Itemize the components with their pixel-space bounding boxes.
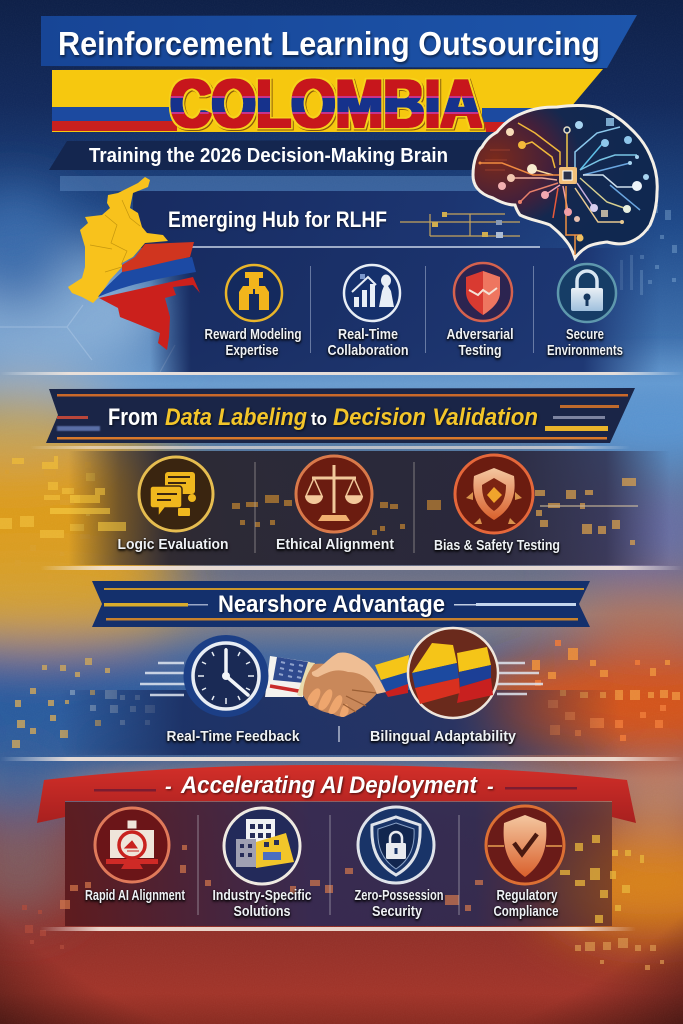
title: Reinforcement Learning Outsourcing <box>58 25 600 62</box>
panel: nearshore content <box>0 628 683 761</box>
ribbon banner <box>37 765 636 823</box>
labels: hub capabilities <box>204 326 623 359</box>
icon: ethical alignment <box>296 456 372 532</box>
light stripe above hub panel <box>60 176 485 191</box>
pixel band <box>60 835 644 923</box>
banner heading: - <box>165 776 172 798</box>
labels: deployment: Rapid AI Alignment <box>85 887 185 904</box>
labels: deployment <box>85 887 558 920</box>
icon: colombian flags <box>408 628 498 718</box>
banner: data labeling to decision validation <box>46 388 635 443</box>
icon: real-time collaboration <box>344 265 400 321</box>
icon: regulatory compliance <box>486 806 564 884</box>
labels: decision validation: Logic Evaluation <box>118 536 228 553</box>
panel: accelerating ai deployment <box>37 765 644 931</box>
labels: decision validation: Ethical Alignment <box>276 536 394 553</box>
subtitle: Training the 2026 Decision-Making Brain <box>89 145 448 167</box>
icon: logic evaluation <box>139 457 213 531</box>
panel: decision validation <box>30 446 683 570</box>
icon: industry-specific solutions <box>224 808 300 884</box>
icon: handshake <box>303 652 386 717</box>
labels: deployment: Security <box>372 903 423 920</box>
labels: hub capabilities: Secure <box>566 326 604 343</box>
divider lines <box>310 266 534 353</box>
labels: nearshore: Bilingual Adaptability <box>370 728 517 745</box>
icon: adversarial testing <box>454 263 512 321</box>
banner heading: From <box>108 404 158 431</box>
icon: secure environments <box>558 264 616 322</box>
icon row: hub capabilities <box>204 263 623 359</box>
hex outline decoration <box>0 305 175 372</box>
banner heading: Data Labeling <box>165 404 307 431</box>
banner heading: to <box>311 409 327 429</box>
labels: hub capabilities: Testing <box>458 342 502 359</box>
labels: deployment: Regulatory <box>496 887 558 904</box>
speed lines <box>140 663 543 695</box>
subtitle banner <box>49 140 492 170</box>
icon: us flag cuff <box>265 656 315 697</box>
icon: bias and safety testing <box>455 455 533 533</box>
colombia flag band <box>52 66 603 142</box>
labels: deployment: Zero-Possession <box>354 887 444 904</box>
divider lines <box>198 815 459 915</box>
labels: hub capabilities: Environments <box>547 342 623 359</box>
labels: hub capabilities: Expertise <box>226 342 278 359</box>
icon: real-time clock <box>184 635 268 717</box>
pixel band <box>50 478 638 545</box>
banner heading: Accelerating AI Deployment <box>180 772 478 799</box>
icon: zero-possession security <box>358 807 434 883</box>
divider lines <box>255 462 414 553</box>
icon: circuit brain <box>473 106 657 258</box>
labels: nearshore <box>166 728 517 745</box>
labels: deployment: Solutions <box>234 903 290 920</box>
banner: nearshore advantage <box>92 581 590 627</box>
banner heading: Decision Validation <box>333 404 538 431</box>
banner heading: - <box>487 776 494 798</box>
divider line <box>338 726 340 742</box>
icon: reward modeling <box>226 265 282 321</box>
labels: hub capabilities: Reward Modeling <box>204 326 302 343</box>
colombia wordmark: COLOMBIA <box>170 66 482 142</box>
icon: colombia flag cuff <box>375 655 409 697</box>
circuit lines beside heading <box>400 212 520 238</box>
labels: nearshore: Real-Time Feedback <box>166 728 300 745</box>
labels: deployment: Compliance <box>494 903 558 920</box>
labels: deployment: Industry-Specific <box>212 887 312 904</box>
banner heading: Nearshore Advantage <box>218 591 445 618</box>
icon: rapid ai alignment <box>95 808 169 882</box>
panel: emerging hub <box>0 191 683 375</box>
labels: hub capabilities: Real-Time <box>338 326 398 343</box>
labels: hub capabilities: Adversarial <box>446 326 514 343</box>
labels: hub capabilities: Collaboration <box>328 342 408 359</box>
icon: brain chip <box>559 167 577 184</box>
labels: decision validation: Bias & Safety Testing <box>434 537 560 554</box>
labels: decision validation <box>118 536 560 554</box>
icon: colombia map <box>68 177 200 350</box>
title banner <box>41 15 637 68</box>
heading: emerging hub: Emerging Hub for RLHF <box>168 207 387 232</box>
